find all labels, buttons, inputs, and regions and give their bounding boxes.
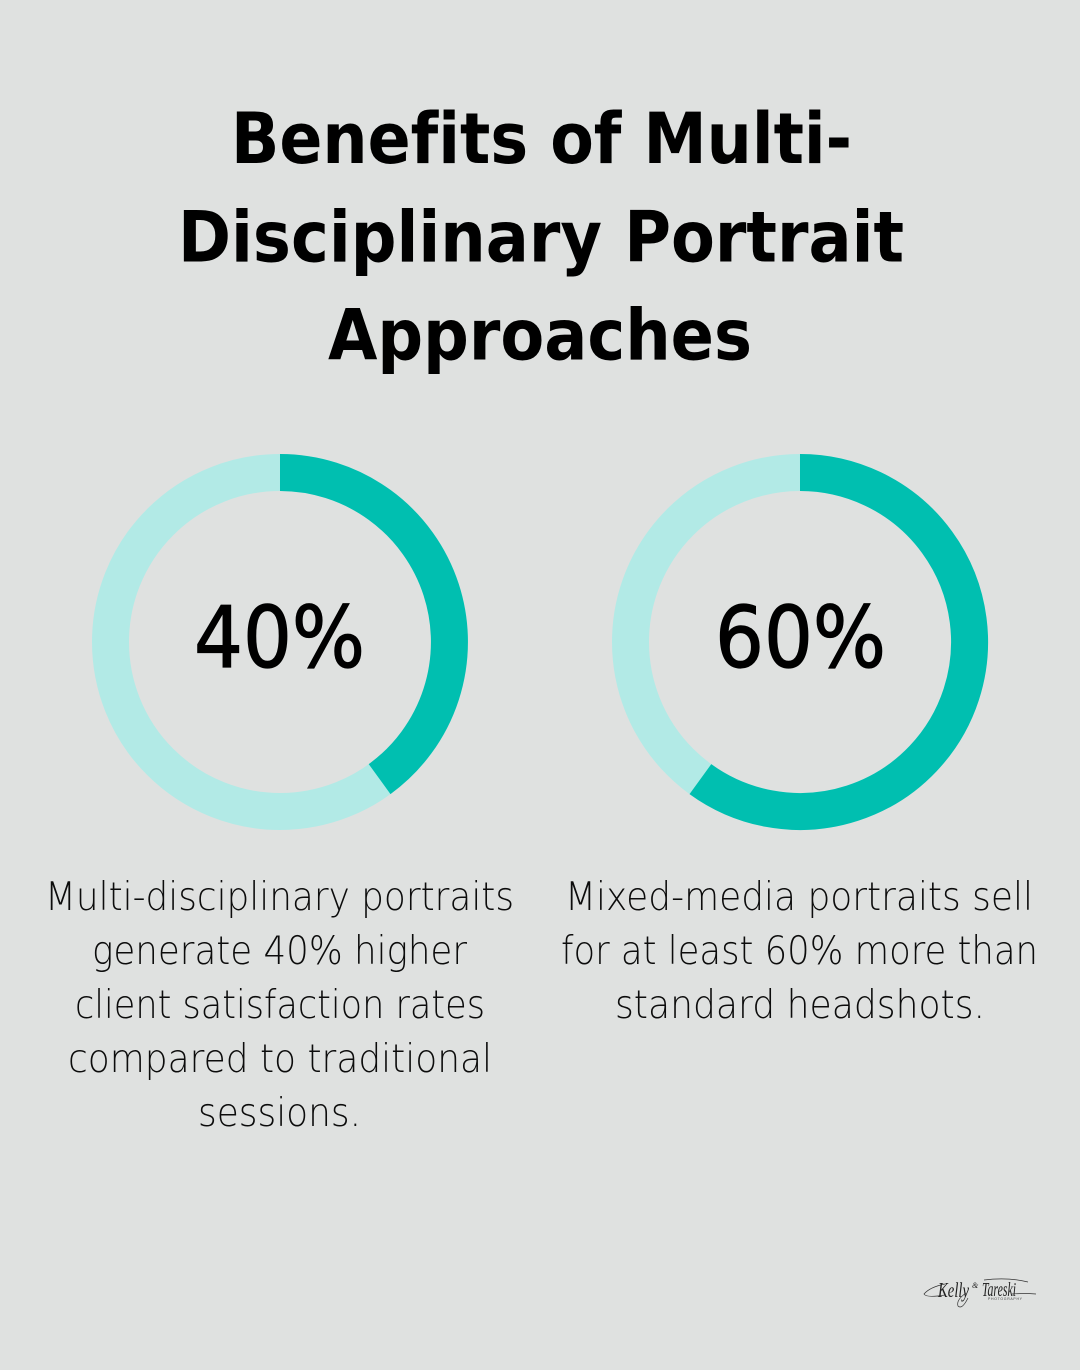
text block: 40% description: client satisfaction rates <box>75 983 485 1028</box>
text block: 60% description <box>561 875 1038 1028</box>
value: 40%: 40% <box>194 589 365 688</box>
text block: 40% description: generate 40% higher <box>92 929 467 974</box>
donut chart: 40% <box>110 472 450 812</box>
text block: 40% description <box>45 875 514 1136</box>
title: Disciplinary Portrait <box>178 196 904 278</box>
logo: Kelly & Tareski Photography signature: Kelly <box>937 1278 969 1302</box>
text block: 40% description: sessions. <box>198 1091 361 1136</box>
donut chart: 60% <box>630 472 970 812</box>
text block: 60% description: Mixed-media portraits sell <box>565 875 1033 920</box>
text block: 40% description: compared to traditional <box>68 1037 492 1082</box>
value: 60%: 60% <box>715 589 886 688</box>
text block: 60% description: standard headshots. <box>615 983 985 1028</box>
title: Approaches <box>328 294 752 376</box>
text block: 60% description: for at least 60% more than <box>561 929 1038 974</box>
logo: Kelly & Tareski Photography signature <box>924 1278 1036 1307</box>
text block: 40% description: Multi-disciplinary portraits <box>45 875 514 920</box>
title <box>178 97 904 376</box>
logo: Kelly & Tareski Photography signature: & <box>972 1281 979 1290</box>
logo: Kelly & Tareski Photography signature: Tareski <box>982 1279 1016 1301</box>
title: Benefits of Multi- <box>231 97 852 180</box>
logo: Kelly & Tareski Photography signature: PHOTOGRAPHY <box>988 1297 1023 1301</box>
